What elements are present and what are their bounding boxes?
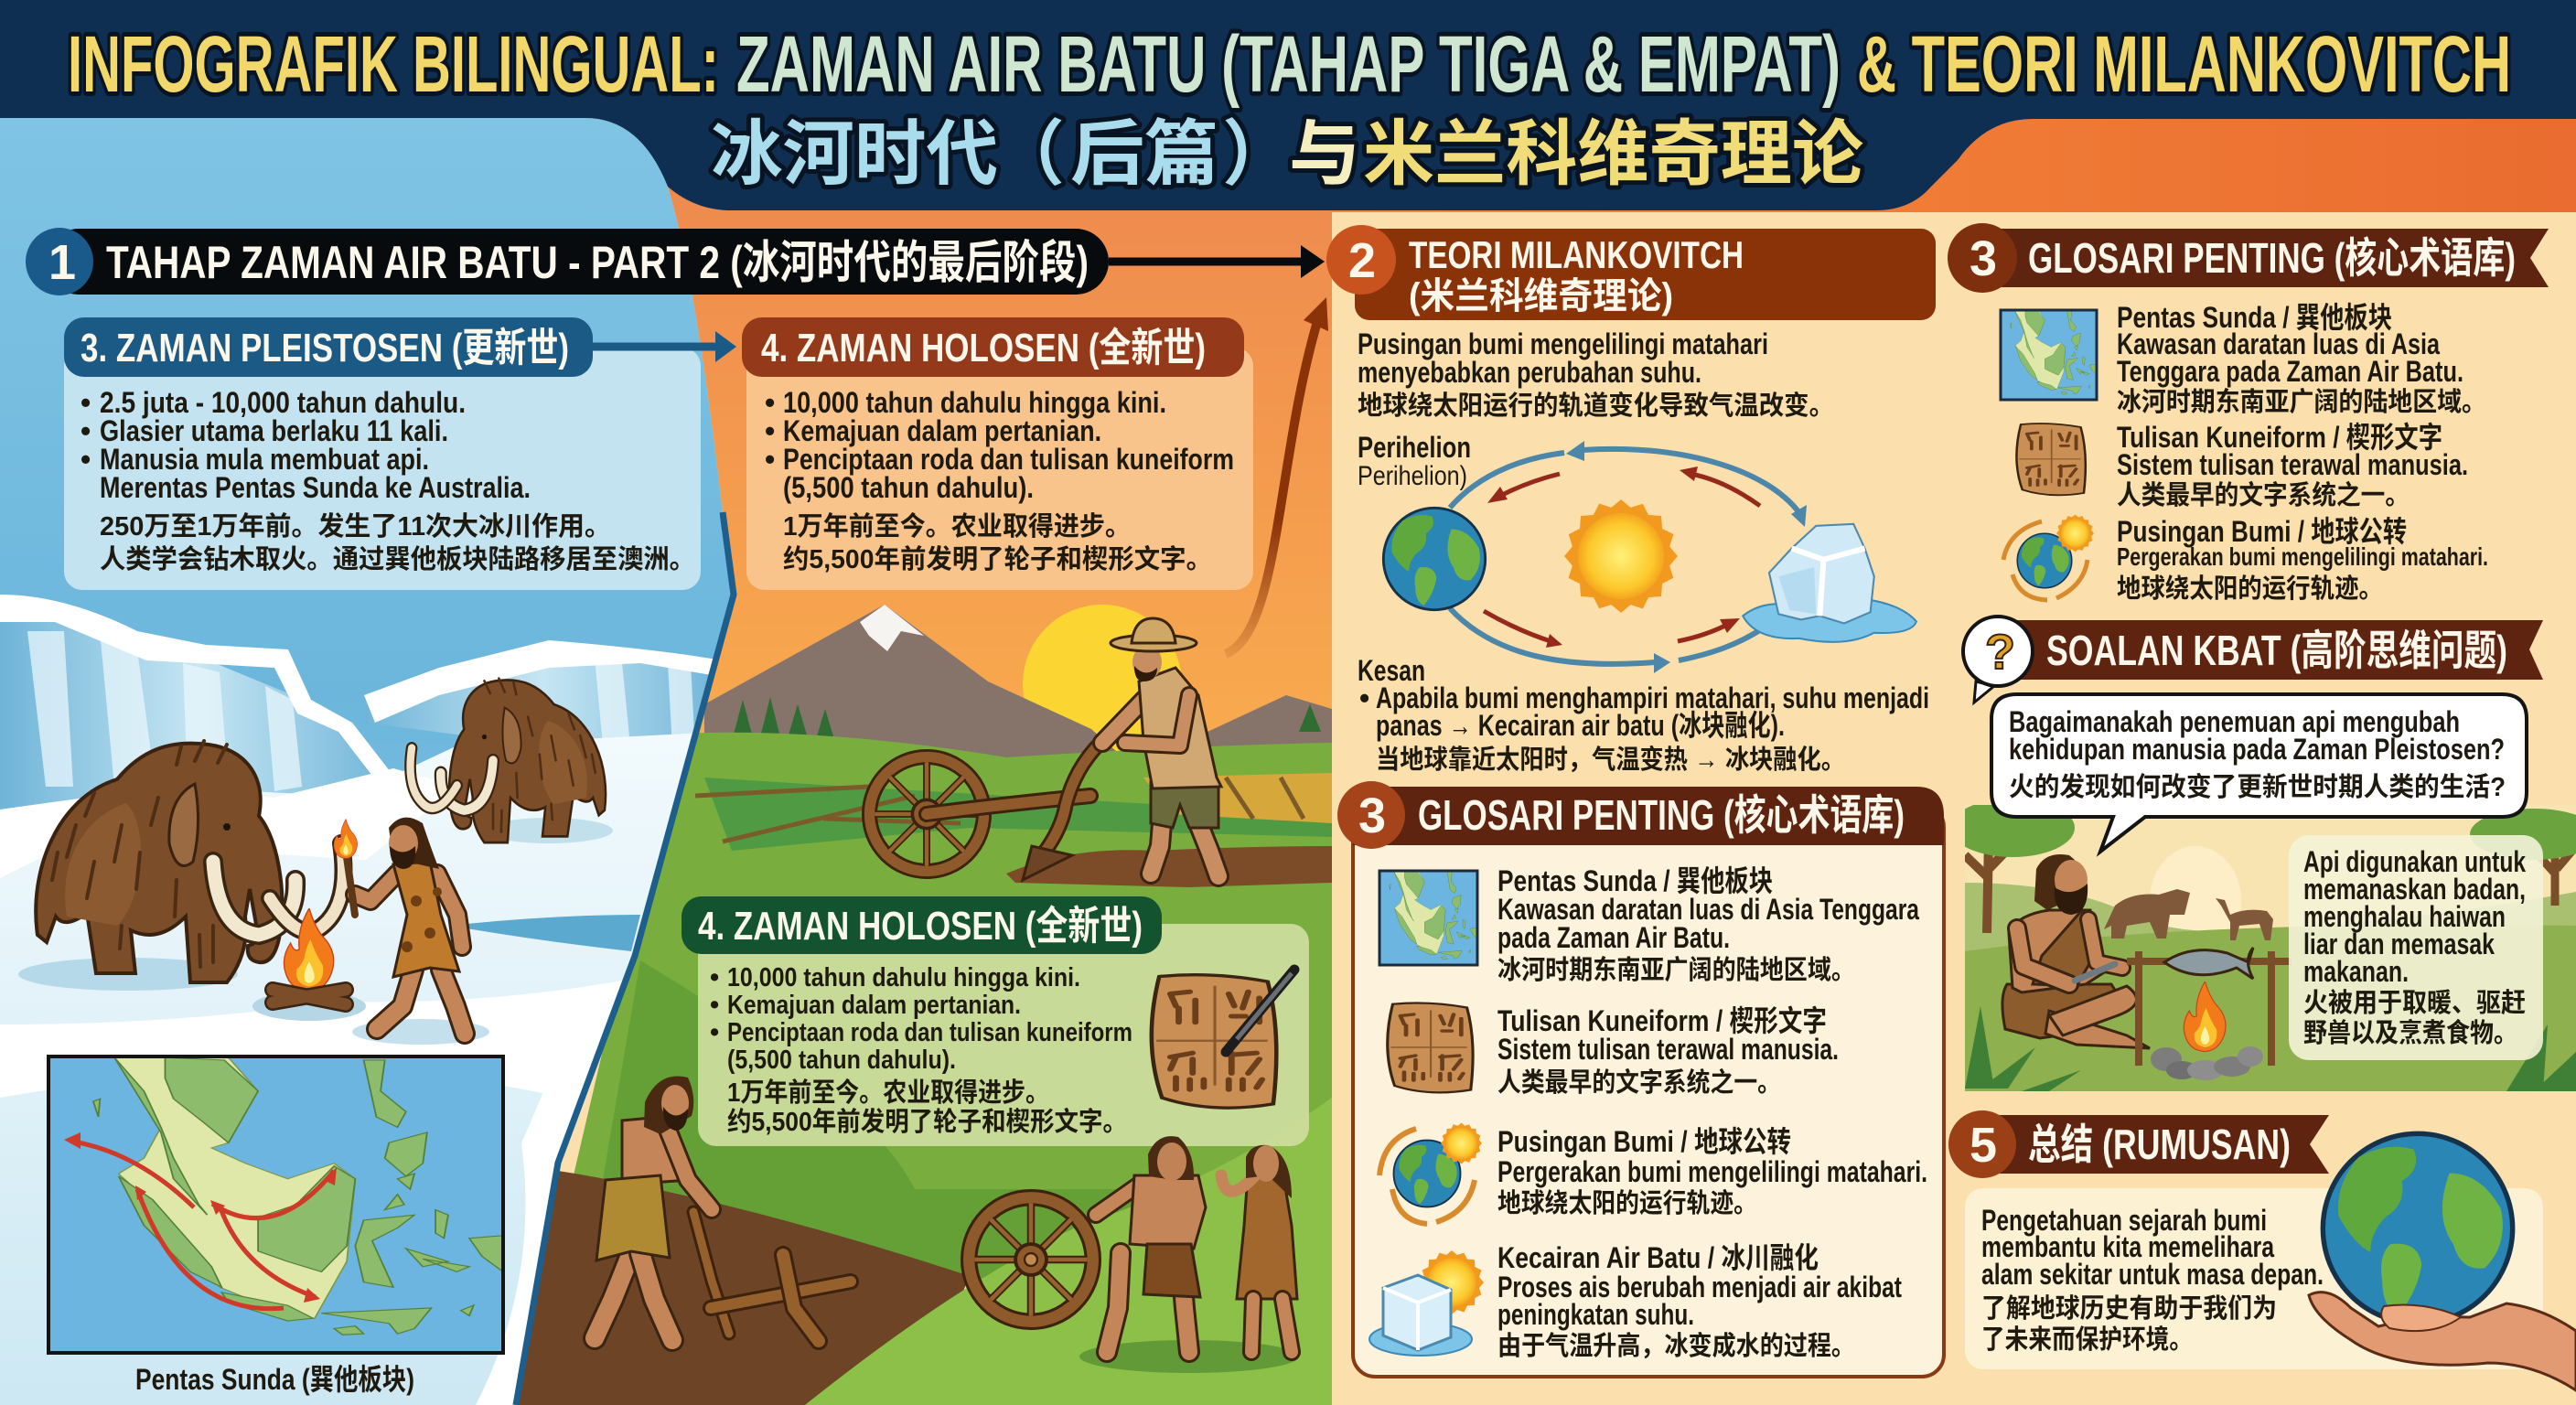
label: Perihelion: Perihelion: [1358, 431, 1471, 464]
effects text: Apabila bumi menghampiri matahari, suhu menjadi: [1376, 681, 1929, 714]
term: Kuneiform: [2016, 421, 2468, 510]
Holocene facts: (5,500 tahun dahulu).: [783, 471, 1034, 504]
Holocene lower facts: •: [710, 1018, 719, 1047]
panel: Holocene upper: [742, 317, 1253, 590]
panel: orange strip upper right: [1332, 110, 2576, 212]
Pleistocene facts: •: [80, 443, 91, 476]
Holocene facts: 10,000 tahun dahulu hingga kini.: [783, 386, 1166, 419]
illustration: fire with stones: [2151, 981, 2263, 1080]
title: Malay line: [68, 20, 2511, 109]
illustration: farmer with wheeled plough: [870, 618, 1221, 880]
term: Pentas Sunda: 冰河时期东南亚广阔的陆地区域。: [2117, 387, 2486, 417]
diagram: earth orbit: [1383, 441, 1916, 673]
panel: Pleistocene: [64, 317, 701, 590]
Holocene lower facts: 1万年前至今。农业取得进步。: [727, 1078, 1049, 1108]
panel: answer text: menghalau haiwan: [2303, 900, 2506, 933]
panel: summary: 了解地球历史有助于我们为: [1981, 1293, 2277, 1324]
term: Kuneiform: Sistem tulisan terawal manusia.: [2117, 448, 2468, 481]
panel: glossary upper: 3: [1970, 231, 1997, 286]
label: Perihelion: [1358, 431, 1471, 491]
divider: ice and land border: [516, 512, 734, 1405]
illustration: roasting rack and fish: [2127, 948, 2292, 1066]
panel: summary: membantu kita memelihara: [1981, 1230, 2274, 1263]
Pleistocene facts: •: [80, 414, 91, 447]
Holocene lower facts: 10,000 tahun dahulu hingga kini.: [727, 963, 1080, 992]
illustration: woolly mammoth large: [36, 741, 344, 982]
Holocene facts: Kemajuan dalam pertanian.: [783, 414, 1101, 447]
Holocene lower facts: (5,500 tahun dahulu).: [727, 1046, 956, 1075]
callout: KBAT question: Bagaimanakah penemuan api mengubah: [2009, 705, 2460, 738]
panel: answer text: liar dan memasak: [2303, 928, 2495, 960]
section 1 banner: 1: [48, 235, 76, 290]
effects text: [1358, 654, 1929, 775]
term: Kecairan Air Batu: Proses ais berubah menjadi air akibat: [1497, 1271, 1902, 1303]
label: Perihelion: Perihelion): [1358, 461, 1467, 491]
panel: answer text: 火被用于取暖、驱赶: [2303, 988, 2526, 1018]
illustration: fields: [549, 733, 1332, 1281]
section 1 banner: [26, 228, 1109, 295]
arrow: curved brown to section 2: [1226, 297, 1328, 654]
illustration: mountains: [704, 605, 1332, 768]
illustration: woolly mammoth small: [411, 679, 606, 842]
panel: Pleistocene: 3. ZAMAN PLEISTOSEN (更新世): [80, 326, 569, 370]
title: Chinese line: [711, 113, 1863, 194]
Pleistocene facts: [80, 386, 695, 574]
icon: map: [1379, 871, 1477, 965]
panel: summary: Pengetahuan sejarah bumi: [1981, 1204, 2267, 1237]
panel: glossary lower: GLOSARI PENTING (核心术语库): [1418, 791, 1905, 839]
heading: Soalan KBAT: [1963, 617, 2543, 702]
term: Pusingan Bumi: 地球绕太阳的运行轨迹。: [2117, 574, 2383, 604]
illustration: ice cliffs: [0, 595, 723, 810]
title: Chinese line: ）: [1222, 113, 1293, 194]
title: Chinese line: 与: [1289, 113, 1360, 194]
term: Pusingan Bumi: [1379, 1117, 1927, 1224]
panel: Holocene lower: [682, 896, 1309, 1146]
Holocene facts: 约5,500年前发明了轮子和楔形文字。: [783, 544, 1212, 574]
panel: Milankovitch theory: [1326, 225, 1936, 775]
icon: question bubble: [1963, 617, 2033, 702]
panel: glossary lower: 3: [1358, 788, 1386, 843]
header: navy banner: [0, 0, 2576, 210]
term: Kecairan Air Batu: 由于气温升高，冰变成水的过程。: [1497, 1331, 1855, 1361]
panel: summary: [1948, 1110, 2543, 1369]
map: Pentas Sunda: [48, 1056, 503, 1353]
term: Pentas Sunda: Pentas Sunda / 巽他板块: [2117, 301, 2392, 334]
term: Kuneiform: 人类最早的文字系统之一。: [1497, 1067, 1781, 1098]
panel: Holocene upper: 4. ZAMAN HOLOSEN (全新世): [761, 326, 1206, 370]
illustration: caveman with torch: [334, 818, 465, 1034]
panel: Milankovitch theory: (米兰科维奇理论): [1409, 276, 1673, 316]
panel: Milankovitch theory: 2: [1348, 233, 1376, 288]
Holocene lower facts: [710, 963, 1132, 1137]
term: Pentas Sunda: [1379, 864, 1919, 985]
Holocene facts: 1万年前至今。农业取得进步。: [783, 511, 1131, 542]
Holocene lower facts: 约5,500年前发明了轮子和楔形文字。: [727, 1107, 1127, 1137]
term: Pusingan Bumi: Pusingan Bumi / 地球公转: [1497, 1125, 1791, 1158]
panel: answer text: [2289, 835, 2543, 1060]
illustration: plowman and plough: [595, 1077, 851, 1341]
Holocene lower facts: •: [710, 991, 719, 1020]
Pleistocene facts: •: [80, 386, 91, 419]
panel: KBAT scene: [1950, 799, 2576, 1091]
illustration: campfire: [252, 908, 366, 1021]
icon: sun: [1547, 482, 1695, 630]
illustration: animals: [2104, 889, 2273, 940]
panel: Milankovitch theory: TEORI MILANKOVITCH: [1409, 233, 1744, 276]
callout: KBAT question: 火的发现如何改变了更新世时期人类的生活?: [2009, 772, 2506, 802]
term: Kuneiform: Sistem tulisan terawal manusia.: [1497, 1033, 1839, 1066]
arrow: section 1 to section 2: [1109, 245, 1325, 278]
Holocene facts: Penciptaan roda dan tulisan kuneiform: [783, 443, 1234, 476]
title: Chinese line: 米兰科维奇理论: [1363, 113, 1863, 194]
panel: summary: 了未来而保护环境。: [1981, 1325, 2193, 1355]
panel: ice age scene: [0, 110, 759, 1405]
panel: farming landscape: [512, 187, 1336, 1405]
term: Pusingan Bumi: [2003, 509, 2488, 604]
panel: summary: 5: [1970, 1118, 1997, 1173]
arrow: Pleistocene to Holocene: [593, 331, 736, 362]
Pleistocene facts: Merentas Pentas Sunda ke Australia.: [100, 471, 531, 504]
title: Malay line: ZAMAN AIR BATU (TAHAP TIGA & EMPAT): [736, 20, 1841, 109]
Pleistocene facts: 250万至1万年前。发生了11次大冰川作用。: [100, 511, 611, 542]
effects text: 当地球靠近太阳时，气温变热 → 冰块融化。: [1376, 745, 1845, 775]
effects text: panas → Kecairan air batu (冰块融化).: [1376, 709, 1785, 742]
Holocene facts: •: [765, 414, 775, 447]
term: Pusingan Bumi: Pergerakan bumi mengelilingi matahari.: [1497, 1155, 1927, 1188]
intro text: menyebabkan perubahan suhu.: [1358, 356, 1701, 389]
panel: summary: alam sekitar untuk masa depan.: [1981, 1258, 2324, 1291]
panel: glossary lower: [1337, 781, 1944, 1377]
panel: answer text: makanan.: [2303, 955, 2409, 988]
illustration: trees: [1950, 799, 2576, 933]
illustration: snow ground: [0, 732, 732, 1405]
title: Chinese line: （: [993, 113, 1065, 194]
term: Kecairan Air Batu: [1369, 1240, 1902, 1361]
effects text: Kesan: [1358, 654, 1425, 687]
icon: earth orbit: [1379, 1117, 1488, 1224]
Holocene facts: [765, 386, 1234, 574]
term: Pentas Sunda: Pentas Sunda / 巽他板块: [1497, 864, 1773, 897]
term: Pentas Sunda: Kawasan daratan luas di Asia Tenggara: [1497, 893, 1919, 926]
Holocene lower facts: Penciptaan roda dan tulisan kuneiform: [727, 1018, 1132, 1047]
panel: glossary upper: [1948, 223, 2549, 604]
term: Pusingan Bumi: 地球绕太阳的运行轨迹。: [1497, 1188, 1757, 1218]
effects text: •: [1359, 681, 1369, 714]
icon: map: [2001, 310, 2097, 400]
Holocene lower facts: •: [710, 963, 719, 992]
Holocene facts: •: [765, 443, 775, 476]
Pleistocene facts: Glasier utama berlaku 11 kali.: [100, 414, 448, 447]
icon: melting ice: [1743, 524, 1916, 642]
term: Kecairan Air Batu: peningkatan suhu.: [1497, 1298, 1694, 1331]
illustration: globe in hand: [2309, 1133, 2576, 1390]
callout: KBAT question: [1991, 694, 2527, 852]
section 1 banner: TAHAP ZAMAN AIR BATU - PART 2 (冰河时代的最后阶段): [106, 237, 1089, 288]
Holocene lower facts: Kemajuan dalam pertanian.: [727, 991, 1021, 1020]
Holocene facts: •: [765, 386, 775, 419]
term: Pentas Sunda: 冰河时期东南亚广阔的陆地区域。: [1497, 955, 1855, 985]
map caption: Pentas Sunda (巽他板块): [135, 1363, 414, 1396]
panel: Holocene lower: 4. ZAMAN HOLOSEN (全新世): [698, 904, 1143, 949]
title: Malay line: INFOGRAFIK BILINGUAL:: [68, 20, 719, 109]
term: Pentas Sunda: Tenggara pada Zaman Air Batu.: [2117, 355, 2463, 388]
term: Pusingan Bumi: Pusingan Bumi / 地球公转: [2117, 515, 2407, 548]
Pleistocene facts: Manusia mula membuat api.: [100, 443, 429, 476]
title: Chinese line: 冰河时代: [711, 113, 998, 194]
Pleistocene facts: 2.5 juta - 10,000 tahun dahulu.: [100, 386, 466, 419]
intro text: [1358, 327, 1834, 421]
icon: earth: [1383, 508, 1486, 610]
icon: cuneiform tablet and stylus: [1152, 970, 1294, 1108]
term: Pentas Sunda: pada Zaman Air Batu.: [1497, 921, 1730, 954]
icon: earth orbit: [2003, 509, 2099, 600]
icon: ice cube and sun: [1369, 1240, 1494, 1356]
illustration: setting sun: [1023, 605, 1182, 764]
intro text: Pusingan bumi mengelilingi matahari: [1358, 327, 1768, 360]
intro text: 地球绕太阳运行的轨道变化导致气温改变。: [1358, 391, 1834, 421]
title: Chinese line: 后篇: [1070, 113, 1218, 194]
panel: summary: 总结 (RUMUSAN): [2028, 1121, 2291, 1168]
illustration: seated man with fish: [2002, 854, 2150, 1048]
illustration: people with wheel: [969, 1136, 1297, 1352]
Pleistocene facts: 人类学会钻木取火。通过巽他板块陆路移居至澳洲。: [100, 544, 695, 574]
migration arrows: [73, 1142, 334, 1309]
term: Pentas Sunda: [2001, 301, 2486, 417]
term: Kecairan Air Batu: Kecairan Air Batu / 冰川融化: [1497, 1241, 1819, 1274]
icon: question bubble: ?: [1985, 625, 2015, 680]
panel: answer text: 野兽以及烹煮食物。: [2303, 1018, 2517, 1048]
term: Kuneiform: Tulisan Kuneiform / 楔形文字: [1497, 1004, 1827, 1037]
term: Pentas Sunda: Kawasan daratan luas di Asia: [2117, 327, 2440, 360]
term: Kuneiform: Tulisan Kuneiform / 楔形文字: [2117, 421, 2442, 454]
term: Kuneiform: [1388, 1003, 1839, 1098]
term: Kuneiform: 人类最早的文字系统之一。: [2117, 480, 2410, 510]
